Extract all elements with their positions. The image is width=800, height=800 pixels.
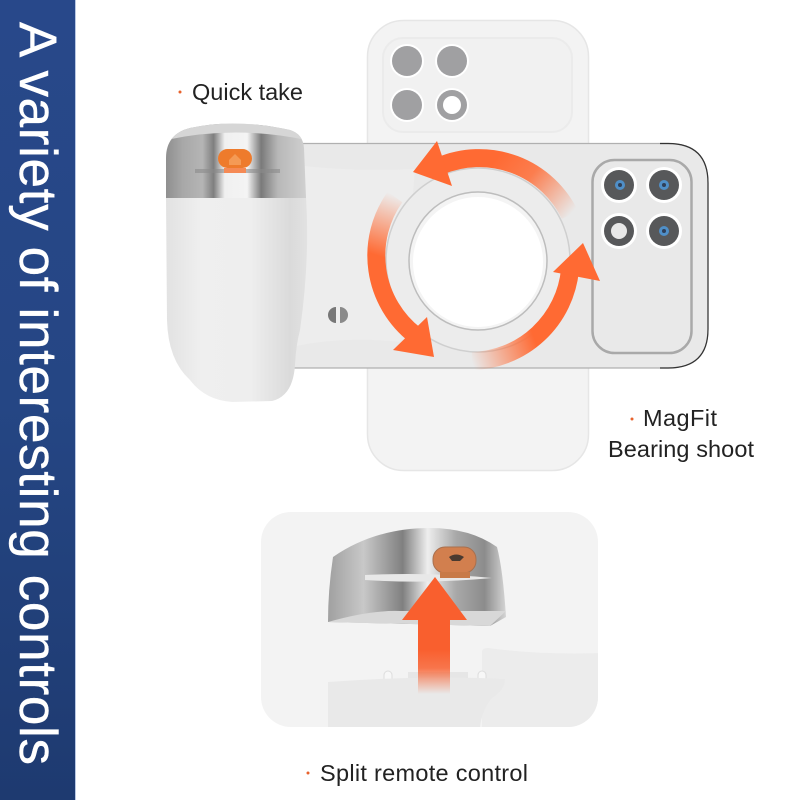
illustration: vertical ghost phone bbox=[368, 20, 588, 470]
arrow: bottom right rotation bbox=[472, 243, 600, 361]
label: magfit bearing shoot bbox=[608, 405, 754, 462]
grip body bbox=[166, 197, 307, 402]
camera module bbox=[592, 160, 692, 353]
label: quick take: Quick take bbox=[192, 79, 303, 105]
label: split remote control: Split remote control bbox=[320, 760, 528, 786]
label: magfit bearing shoot: MagFit bbox=[643, 405, 717, 431]
arrow: upward bbox=[402, 577, 467, 694]
bluetooth indicator bbox=[328, 307, 348, 323]
detached shutter button bbox=[433, 547, 476, 578]
vertical title: A variety of interesting controls bbox=[8, 22, 67, 765]
illustration: horizontal phone bbox=[290, 144, 708, 368]
metal cap bbox=[166, 120, 306, 198]
shutter button bbox=[218, 149, 252, 173]
panel: left title band bbox=[0, 0, 76, 800]
illustration: textured grip plate bbox=[296, 165, 415, 346]
arrow: left rotation bbox=[376, 197, 434, 357]
arrow: top rotation bbox=[413, 141, 570, 215]
illustration: magnetic ring bbox=[386, 168, 570, 352]
detached body bbox=[328, 670, 505, 727]
detached metal cap bbox=[328, 528, 506, 626]
illustration: shooting grip bbox=[166, 120, 348, 402]
label: magfit bearing shoot: Bearing shoot bbox=[608, 436, 754, 462]
panel: split remote control bbox=[261, 512, 600, 727]
